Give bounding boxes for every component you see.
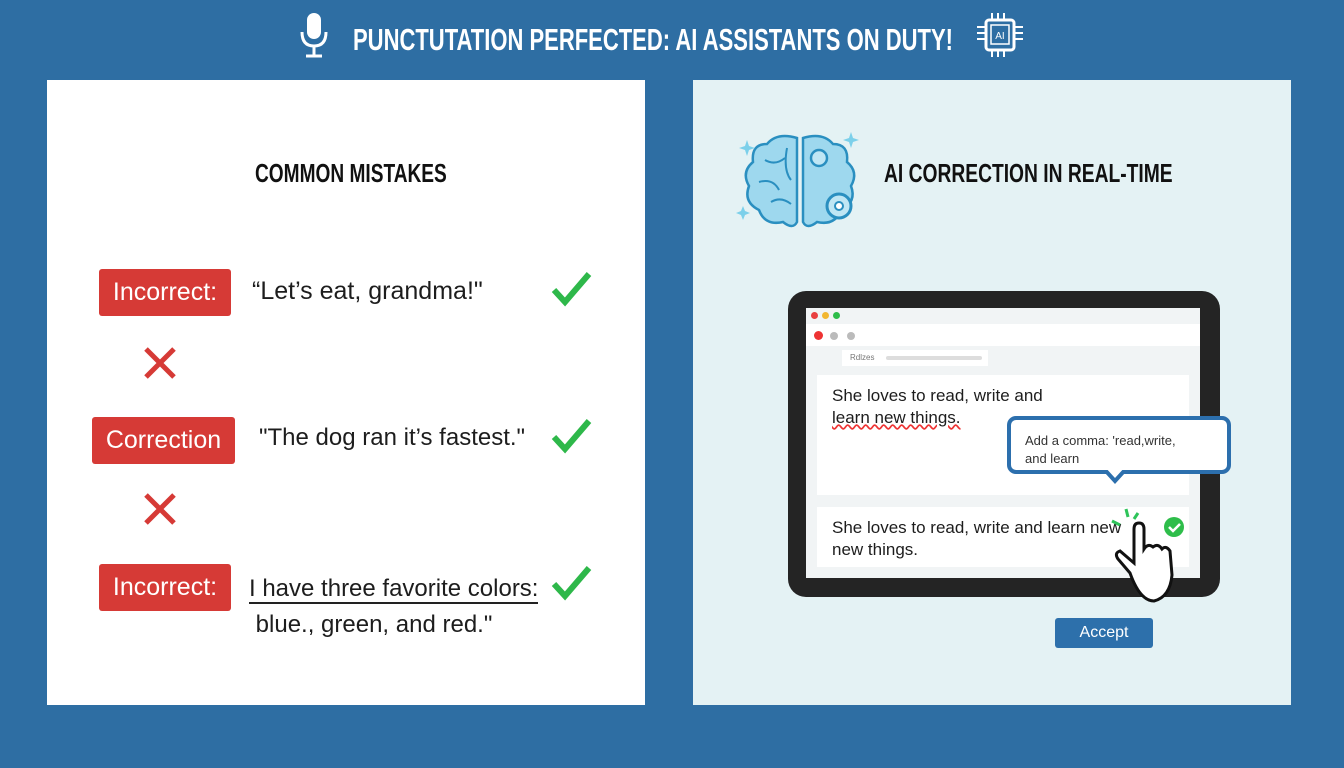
icon: check 2	[552, 419, 592, 454]
tag: incorrect 1: Incorrect:	[113, 278, 217, 306]
icon: microphone	[300, 13, 328, 58]
text box: original: learn new things.	[832, 408, 961, 427]
browser window	[806, 308, 1200, 578]
text box: original: She loves to read, write and	[832, 386, 1043, 405]
icon: check 3	[552, 566, 592, 600]
heading: common mistakes: COMMON MISTAKES	[255, 158, 447, 188]
tag: incorrect 2	[99, 564, 231, 611]
icon: check 1	[552, 272, 592, 306]
text: colors: blue., green, and red."	[256, 611, 492, 638]
icon: cross 1	[144, 347, 176, 379]
icon: AI chip: AI	[995, 31, 1005, 42]
icon: callout pointer	[1106, 470, 1124, 484]
tag: correction	[92, 417, 235, 464]
button: accept	[1055, 618, 1153, 648]
browser window: Rdlzes	[850, 353, 874, 362]
text box: original	[817, 375, 1189, 495]
callout: add a comma: and learn	[1025, 451, 1079, 466]
title: PUNCTUTATION PERFECTED: AI ASSISTANTS ON DUTY!	[353, 22, 953, 57]
tag: incorrect 2: Incorrect:	[113, 573, 217, 601]
text box: corrected: She loves to read, write and learn new	[832, 518, 1121, 537]
text box: corrected	[817, 507, 1189, 567]
panel: AI correction	[693, 80, 1291, 705]
tablet mockup	[788, 291, 1220, 597]
text: dog ran: "The dog ran it’s fastest."	[259, 424, 525, 451]
text: lets eat grandma: “Let’s eat, grandma!"	[252, 277, 483, 305]
text box: corrected: new things.	[832, 540, 918, 559]
text: colors: I have three favorite colors:	[249, 575, 538, 602]
heading: AI correction in real-time: AI CORRECTION IN REAL-TIME	[884, 158, 1173, 188]
button: accept: Accept	[1080, 624, 1128, 641]
panel: common mistakes	[47, 80, 645, 705]
text: colors	[249, 575, 538, 638]
tag: correction: Correction	[106, 426, 221, 454]
icon: hand click with check	[1111, 508, 1184, 602]
callout: add a comma	[1007, 416, 1231, 474]
tag: incorrect 1	[99, 269, 231, 316]
callout: add a comma: Add a comma: 'read,write,	[1025, 433, 1176, 448]
icon: brain with gears	[736, 132, 859, 228]
icon: cross 2	[144, 493, 176, 525]
icon: AI chip	[977, 13, 1023, 57]
